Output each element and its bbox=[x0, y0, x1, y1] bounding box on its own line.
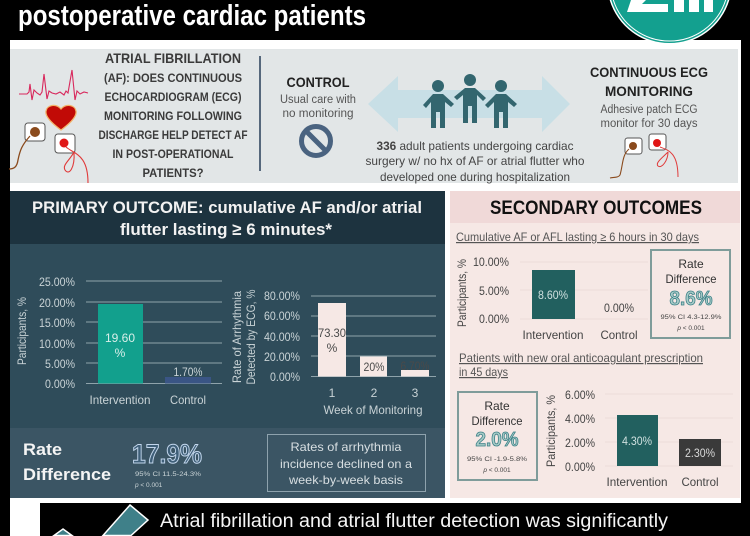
bar chart: participants: 5.00% bbox=[45, 357, 75, 371]
bar chart: arrhythmia by week: Week of Monitoring bbox=[324, 403, 422, 417]
text block: study question: MONITORING FOLLOWING bbox=[104, 109, 242, 123]
bar chart: arrhythmia by week bbox=[230, 289, 436, 417]
text block: population: developed one during hospitalization bbox=[380, 170, 570, 184]
bar chart: arrhythmia by week: Detected by ECG, % bbox=[244, 289, 258, 384]
callout: weekly decline: Rates of arrhythmia bbox=[290, 440, 402, 454]
bar chart: anticoagulant prescription: Control bbox=[682, 475, 718, 489]
bar chart: arrhythmia by week: 2 bbox=[371, 386, 378, 400]
bar chart: participants: 20.00% bbox=[39, 296, 75, 310]
bar chart: participants: 15.00% bbox=[39, 316, 75, 330]
label: rate difference: Difference bbox=[23, 465, 111, 484]
callout: rate difference 8.6%: p < 0.001 bbox=[676, 325, 705, 332]
bar chart: arrhythmia by week: 20.00% bbox=[264, 350, 300, 364]
text block: study question: ATRIAL FIBRILLATION bbox=[105, 50, 241, 66]
bar chart: anticoagulant prescription: 2.30% bbox=[685, 446, 715, 460]
bar chart: participants bbox=[15, 275, 222, 407]
bar chart: participants: Intervention bbox=[90, 393, 150, 407]
double arrow bbox=[368, 76, 570, 132]
bar chart: arrhythmia by week: 1 bbox=[329, 386, 336, 400]
bar chart: AF over 6 hours: 5.00% bbox=[479, 284, 509, 298]
bar chart: arrhythmia by week: 40.00% bbox=[264, 330, 300, 344]
control arm bbox=[280, 74, 356, 156]
bar chart: AF over 6 hours: 0.00% bbox=[479, 312, 509, 326]
header banner bbox=[0, 0, 750, 40]
heading: secondary outcomes: SECONDARY OUTCOMES bbox=[490, 198, 702, 219]
text block: population bbox=[366, 139, 585, 184]
callout: rate difference 8.6%: 8.6% bbox=[670, 288, 713, 310]
callout: rate difference 2.0% bbox=[458, 392, 537, 480]
bar chart: arrhythmia by week: 60.00% bbox=[264, 309, 300, 323]
bar chart: participants: 19.60 bbox=[105, 331, 135, 345]
callout: rate difference 8.6%: Rate bbox=[678, 257, 704, 271]
bar chart: anticoagulant prescription: 4.00% bbox=[565, 412, 595, 426]
icon: patches bbox=[610, 134, 678, 178]
label: rate difference: Rate bbox=[23, 440, 62, 459]
bar chart: participants: Participants, % bbox=[15, 297, 29, 365]
callout: rate difference 8.6%: Difference bbox=[666, 272, 717, 286]
bar chart: anticoagulant prescription: Intervention bbox=[606, 475, 668, 489]
text block: population: 336 adult patients undergoing cardiac bbox=[376, 139, 574, 153]
text block: study question: PATIENTS? bbox=[142, 166, 204, 180]
callout: rate difference 2.0%: Rate bbox=[484, 399, 510, 413]
bar chart: arrhythmia by week: 73.30 bbox=[318, 326, 346, 340]
intervention arm: monitor for 30 days bbox=[600, 118, 698, 130]
conclusion text: Atrial fibrillation and atrial flutter detection was significantly bbox=[160, 511, 669, 532]
callout: weekly decline bbox=[268, 434, 426, 492]
conclusion banner bbox=[40, 503, 750, 536]
bar chart: anticoagulant prescription: Participants, % bbox=[544, 395, 558, 467]
icon: red electrode patch bbox=[55, 134, 88, 183]
panel: secondary outcomes bbox=[450, 191, 740, 498]
logo bbox=[610, 0, 729, 44]
subheading: cumulative AF: Cumulative AF or AFL lasting ≥ 6 hours in 30 days bbox=[456, 230, 699, 244]
text block: study question: (AF): DOES CONTINUOUS bbox=[104, 71, 242, 85]
bar chart: arrhythmia by week: % bbox=[327, 341, 338, 355]
bar chart: participants: 0.00% bbox=[45, 377, 75, 391]
callout: weekly decline: week-by-week basis bbox=[288, 473, 403, 487]
icon: brown electrode patch bbox=[9, 123, 45, 169]
control arm: Usual care with bbox=[280, 94, 356, 106]
stat: 17.9%: 17.9% bbox=[132, 439, 202, 469]
subheading: anticoagulant bbox=[459, 351, 703, 379]
callout: rate difference 2.0%: p < 0.001 bbox=[482, 467, 511, 474]
bar chart: AF over 6 hours: Participants, % bbox=[455, 259, 469, 327]
bar chart: anticoagulant prescription bbox=[544, 388, 733, 489]
icon: three patients bbox=[423, 74, 517, 128]
callout: rate difference 2.0%: Difference bbox=[472, 414, 523, 428]
intervention arm: CONTINUOUS ECG bbox=[590, 64, 708, 80]
bar chart: AF over 6 hours: Intervention bbox=[522, 328, 584, 342]
bar chart: arrhythmia by week: Rate of Arrhythmia bbox=[230, 291, 244, 383]
bar chart: arrhythmia by week: 0.00% bbox=[270, 370, 300, 384]
icon: ecg trace bbox=[19, 70, 88, 100]
bar chart: AF over 6 hours: 8.60% bbox=[538, 288, 568, 302]
callout: rate difference 8.6%: 95% CI 4.3-12.9% bbox=[660, 314, 722, 321]
bar chart: arrhythmia by week: 6.70% bbox=[400, 359, 430, 373]
text block: population: surgery w/ no hx of AF or atrial flutter who bbox=[366, 154, 585, 168]
rate difference strip bbox=[10, 428, 445, 498]
bar chart: AF over 6 hours: 0.00% bbox=[604, 301, 634, 315]
callout: weekly decline: incidence declined on a bbox=[280, 457, 412, 471]
text block: study question: IN POST-OPERATIONAL bbox=[112, 147, 234, 161]
subheading: anticoagulant: in 45 days bbox=[459, 365, 508, 379]
icon: heart bbox=[46, 105, 76, 130]
bar chart: participants: 25.00% bbox=[39, 275, 75, 289]
heading: primary outcome bbox=[32, 198, 422, 239]
bar chart: participants: 1.70% bbox=[174, 365, 203, 379]
callout: rate difference 8.6% bbox=[651, 250, 730, 338]
subheading: anticoagulant: Patients with new oral anticoagulant prescription bbox=[459, 351, 703, 365]
bar chart: participants: 10.00% bbox=[39, 337, 75, 351]
panel: primary outcome bbox=[10, 191, 445, 498]
bar chart: anticoagulant prescription: 6.00% bbox=[565, 388, 595, 402]
icon: check mark bbox=[54, 505, 148, 536]
bar chart: anticoagulant prescription: 2.00% bbox=[565, 436, 595, 450]
control arm: CONTROL bbox=[286, 74, 350, 90]
text block: study question bbox=[98, 50, 248, 180]
intervention arm bbox=[590, 64, 708, 130]
control arm: no monitoring bbox=[282, 108, 354, 120]
text block: study question: DISCHARGE HELP DETECT AF bbox=[98, 128, 248, 142]
confidence interval bbox=[134, 471, 201, 489]
heading: primary outcome: PRIMARY OUTCOME: cumulative AF and/or atrial bbox=[32, 198, 422, 217]
text block: study question: ECHOCARDIOGRAM (ECG) bbox=[104, 90, 242, 104]
callout: rate difference 2.0%: 95% CI -1.9-5.8% bbox=[467, 456, 527, 463]
bar chart: participants: % bbox=[115, 346, 126, 360]
bar chart: participants: Control bbox=[170, 393, 206, 407]
label: rate difference bbox=[23, 440, 111, 484]
callout: rate difference 2.0%: 2.0% bbox=[476, 429, 519, 451]
bar chart: AF over 6 hours: Control bbox=[600, 328, 638, 342]
confidence interval: p < 0.001 bbox=[134, 482, 163, 489]
icon: no symbol bbox=[302, 126, 330, 156]
panel: study overview bbox=[9, 49, 738, 184]
bar chart: anticoagulant prescription: 4.30% bbox=[622, 434, 652, 448]
title: postoperative cardiac patients bbox=[18, 0, 366, 32]
confidence interval: 95% CI 11.5-24.3% bbox=[135, 471, 201, 478]
bar chart: arrhythmia by week: 80.00% bbox=[264, 289, 300, 303]
bar chart: arrhythmia by week: 20% bbox=[364, 360, 385, 374]
bar chart: AF over 6 hours bbox=[455, 255, 648, 342]
intervention arm: MONITORING bbox=[605, 83, 693, 99]
heading: primary outcome: flutter lasting ≥ 6 minutes* bbox=[120, 220, 332, 239]
bar chart: AF over 6 hours: 10.00% bbox=[473, 255, 509, 269]
bar chart: anticoagulant prescription: 0.00% bbox=[565, 460, 595, 474]
intervention arm: Adhesive patch ECG bbox=[600, 104, 698, 116]
bar chart: arrhythmia by week: 3 bbox=[412, 386, 419, 400]
